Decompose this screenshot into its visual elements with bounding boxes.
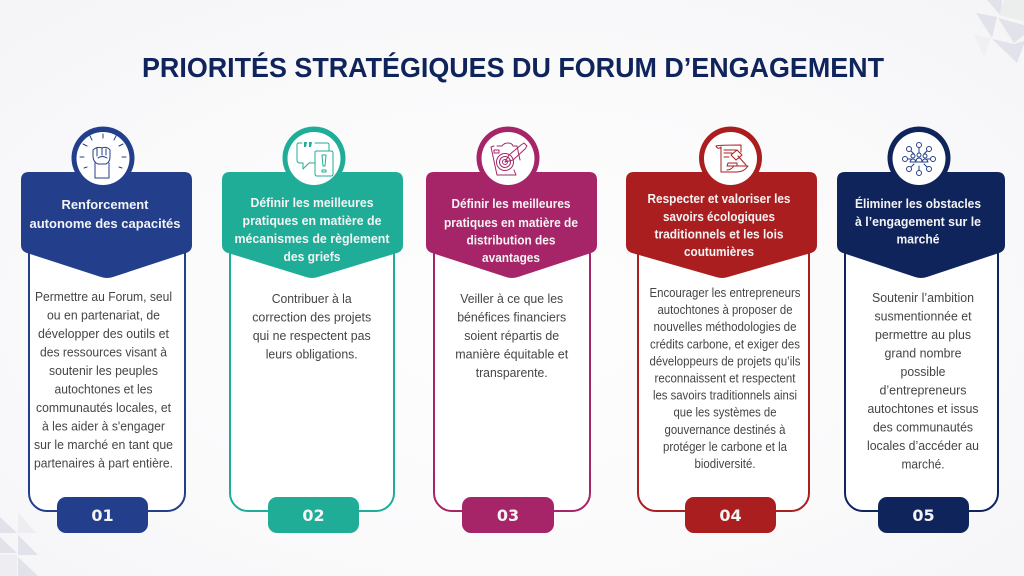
description: Veiller à ce que les: [460, 292, 563, 306]
description: sur le marché en tant que: [34, 438, 173, 452]
description: autochtones à proposer de: [658, 303, 793, 317]
header banner: [426, 172, 597, 278]
panel: savoirs écologiques traditionnels et lois coutumières: [626, 126, 817, 533]
heading: des griefs: [284, 249, 340, 264]
card body outline: [230, 230, 394, 511]
number badge: 03: [497, 506, 519, 525]
number badge: [462, 497, 554, 533]
heading: [444, 196, 578, 265]
icon circle: [699, 126, 762, 190]
number badge: [268, 497, 359, 533]
title: PRIORITÉS STRATÉGIQUES DU FORUM D’ENGAGEMENT: [142, 52, 884, 83]
description: les savoirs traditionnels ainsi: [653, 389, 797, 403]
icon circle: [282, 126, 346, 190]
icon: raised fist: [76, 132, 130, 185]
description: possible: [900, 365, 946, 379]
icon: speech bubble and phone alert: [288, 132, 340, 185]
description: [867, 291, 979, 472]
description: [252, 292, 371, 362]
card body outline: [638, 230, 809, 511]
heading: Définir les meilleures: [452, 196, 570, 211]
number badge: 05: [912, 506, 935, 525]
description: reconnaissent et respectent: [654, 372, 796, 386]
icon circle: [476, 126, 540, 190]
heading: Définir les meilleures: [250, 195, 374, 210]
decoration: bottom left triangles: [0, 512, 38, 576]
heading: avantages: [482, 250, 540, 265]
header banner: [837, 172, 1005, 278]
number badge: 02: [302, 506, 325, 525]
heading: distribution des: [466, 232, 556, 248]
description: [455, 292, 569, 380]
heading: [30, 197, 180, 231]
panel: mécanismes de règlement des griefs: [222, 126, 403, 533]
description: crédits carbone, et exiger des: [650, 337, 800, 351]
description: qui ne respectent pas: [253, 329, 371, 343]
heading: traditionnels et les lois: [654, 226, 784, 242]
description: transparente.: [476, 366, 548, 380]
description: locales d’accéder au: [867, 439, 979, 453]
description: autochtones et les: [54, 382, 152, 396]
heading: Éliminer les obstacles: [855, 196, 981, 211]
panel: distribution des avantages: [426, 126, 597, 533]
description: Soutenir l’ambition: [872, 291, 974, 305]
heading: coutumières: [684, 244, 754, 259]
header banner: [222, 172, 403, 278]
heading: [648, 191, 790, 259]
description: manière équitable et: [455, 348, 569, 362]
decoration: top right triangles: [974, 0, 1024, 63]
description: protéger le carbone et la: [663, 440, 787, 454]
description: à les aider à s'engager: [42, 420, 165, 434]
description: grand nombre: [884, 346, 962, 360]
heading: Respecter et valoriser les: [648, 191, 790, 206]
description: autochtones et issus: [868, 402, 978, 416]
icon circle: [888, 126, 950, 190]
card body outline: [29, 230, 185, 511]
description: [34, 290, 173, 470]
description: gouvernance destinés à: [664, 423, 786, 437]
icon circle: [72, 126, 134, 190]
description: soutenir les peuples: [49, 364, 158, 378]
heading: [855, 196, 981, 246]
description: permettre au plus: [875, 328, 971, 342]
heading: autonome des capacités: [30, 216, 180, 231]
description: développeurs de projets qu’ils: [650, 354, 800, 368]
description: nouvelles méthodologies de: [654, 320, 797, 334]
description: des ressources visant à: [40, 346, 167, 360]
heading: savoirs écologiques: [663, 209, 775, 224]
heading: pratiques en matière de: [444, 215, 578, 230]
panel: obstacles à l'engagement sur le marché: [837, 126, 1005, 533]
panel: renforcement autonome des capacités: [21, 126, 192, 533]
description: ou en partenariat, de: [47, 308, 160, 322]
description: Contribuer à la: [272, 292, 352, 306]
icon: clipboard target and pencil: [482, 132, 534, 185]
description: susmentionnée et: [874, 310, 972, 324]
heading: pratiques en matière de: [242, 213, 382, 228]
description: d’entrepreneurs: [880, 384, 966, 398]
header banner: [626, 172, 817, 278]
description: partenaires à part entière.: [34, 456, 173, 470]
description: des communautés: [873, 420, 973, 434]
icon: scroll and gavel: [704, 132, 757, 185]
description: marché.: [902, 458, 944, 472]
description: Permettre au Forum, seul: [35, 290, 172, 304]
heading: à l’engagement sur le: [855, 214, 981, 229]
number badge: 04: [719, 506, 742, 525]
heading: mécanismes de règlement: [234, 231, 390, 246]
description: soient répartis de: [464, 329, 559, 343]
description: [650, 286, 800, 471]
number badge: [685, 497, 776, 533]
description: communautés locales, et: [36, 401, 172, 415]
number badge: 01: [91, 506, 114, 525]
icon: people network: [892, 132, 946, 185]
heading: marché: [896, 232, 940, 246]
description: que les systèmes de: [674, 406, 777, 420]
heading: Renforcement: [62, 197, 149, 212]
description: leurs obligations.: [266, 348, 358, 362]
number badge: [878, 497, 969, 533]
heading: [234, 195, 390, 264]
number badge: [57, 497, 148, 533]
description: correction des projets: [252, 310, 371, 324]
description: développer des outils et: [38, 327, 170, 341]
card body outline: [845, 230, 998, 511]
description: Encourager les entrepreneurs: [650, 286, 800, 300]
description: biodiversité.: [694, 457, 756, 471]
description: bénéfices financiers: [457, 310, 566, 324]
card body outline: [434, 230, 590, 511]
header banner: [21, 172, 192, 278]
